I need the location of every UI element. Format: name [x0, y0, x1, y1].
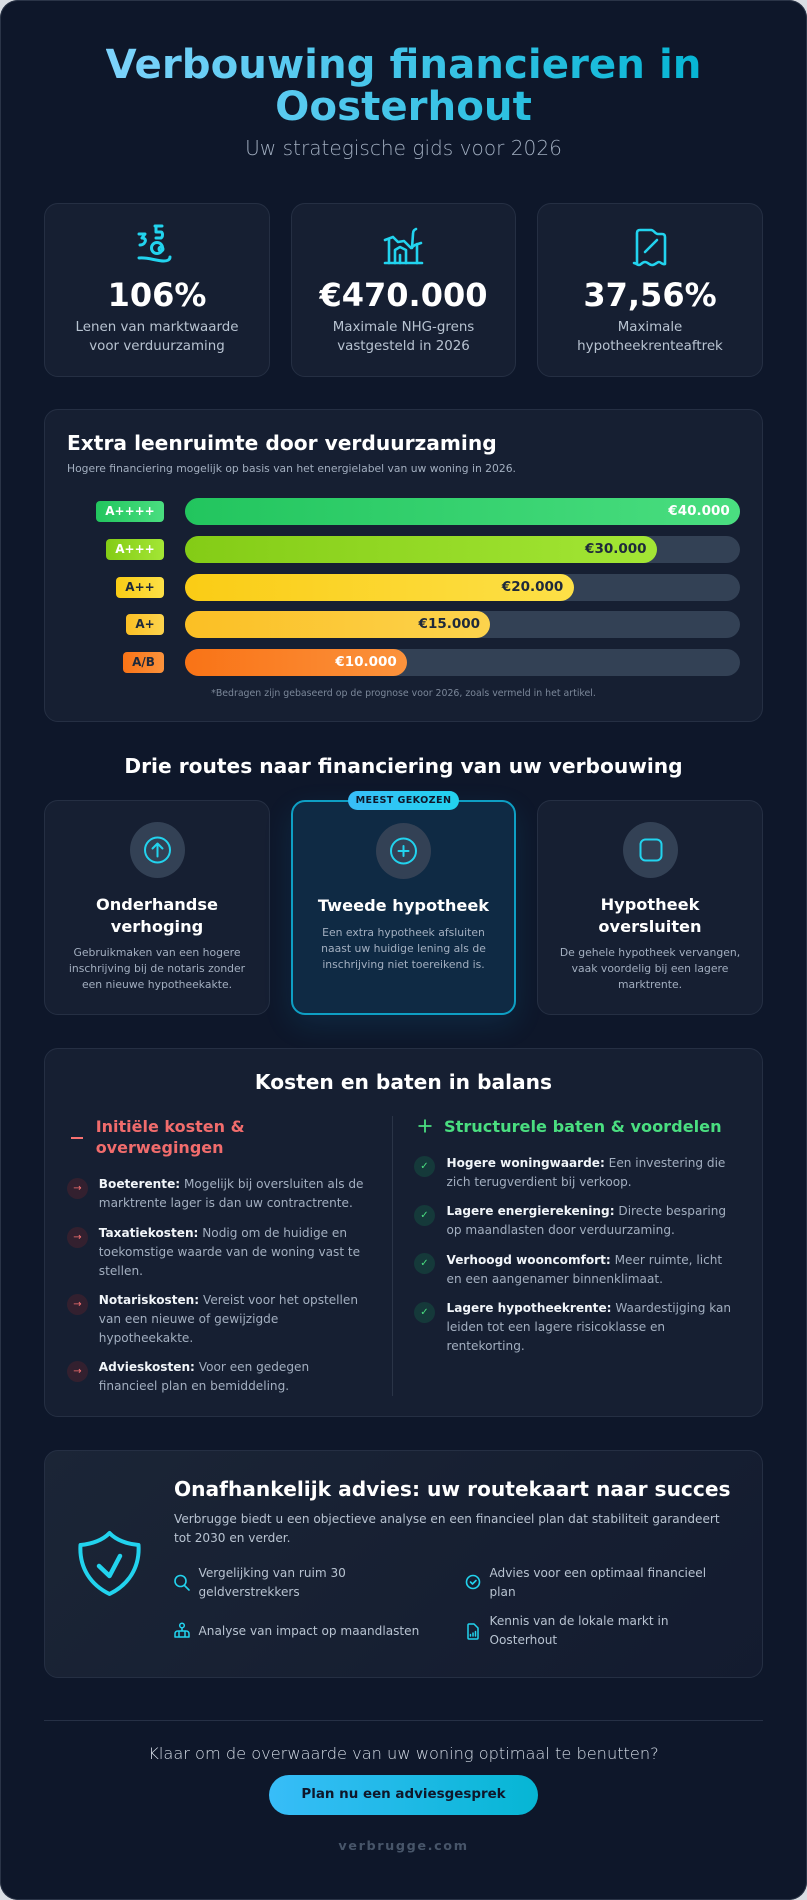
description — [174, 1512, 720, 1544]
icon: people network — [174, 1622, 190, 1638]
route description: een nieuwe hypotheekakte. — [82, 978, 232, 991]
check icon — [414, 1205, 435, 1226]
route title — [598, 895, 702, 936]
value: €470.000 — [319, 276, 488, 314]
benefits column — [414, 1116, 731, 1353]
route title: Tweede hypotheek — [318, 896, 489, 915]
cost item — [98, 1360, 309, 1393]
bar A++: €20.000 — [502, 579, 563, 595]
costs heading: Initiële kosten & — [96, 1116, 245, 1136]
route description: Gebruikmaken van een hogere — [74, 946, 240, 959]
call to action text: Klaar om de overwaarde van uw woning optimaal te benutten? — [148, 1744, 659, 1762]
panel: extra leenruimte chart — [44, 409, 763, 722]
cost item: hypotheekakte. — [99, 1331, 193, 1345]
label: Lenen van marktwaarde — [76, 320, 238, 335]
label: vastgesteld in 2026 — [337, 339, 470, 354]
icon: arrow up in circle — [130, 822, 184, 878]
badge: meest gekozen: MEEST GEKOZEN — [356, 795, 451, 806]
route description: marktrente. — [618, 978, 682, 991]
label — [577, 320, 723, 354]
bullet icon: → — [73, 1183, 82, 1194]
minus icon — [70, 1136, 83, 1138]
bullet icon — [67, 1227, 88, 1248]
label: voor verduurzaming — [89, 339, 225, 354]
route title: Hypotheek — [601, 895, 699, 914]
benefit item: zich terugverdient bij verkoop. — [446, 1174, 632, 1188]
cost item: Boeterente: Mogelijk bij oversluiten als de — [99, 1177, 363, 1191]
feature — [198, 1566, 346, 1598]
benefit item — [446, 1156, 725, 1188]
icon: coins and hand — [138, 224, 172, 262]
divider — [44, 1720, 763, 1721]
cost item: financieel plan en bemiddeling. — [99, 1379, 289, 1393]
route description — [321, 926, 486, 971]
bar A++++: €40.000 — [668, 503, 730, 519]
bullet icon: → — [73, 1299, 82, 1310]
button: Plan nu een adviesgesprek — [301, 1787, 506, 1802]
icon: check circle — [466, 1574, 480, 1590]
label — [76, 320, 238, 354]
footer: verbrugge.com — [338, 1839, 469, 1854]
panel: kosten en baten — [44, 1048, 763, 1417]
check icon: ✓ — [420, 1161, 429, 1172]
feature: Analyse van impact op maandlasten — [198, 1624, 419, 1638]
icon: receipt — [632, 228, 666, 266]
cost item: toekomstige waarde van de woning vast te — [99, 1244, 360, 1258]
feature — [490, 1614, 669, 1647]
feature: Oosterhout — [490, 1633, 557, 1647]
icon: rounded square in circle — [622, 822, 678, 878]
route description: Een extra hypotheek afsluiten — [322, 926, 485, 938]
route description — [69, 946, 246, 991]
benefit item: en een aangenamer binnenklimaat. — [446, 1272, 663, 1286]
value: 37,56% — [583, 276, 717, 314]
benefit item: Verhoogd wooncomfort: Meer ruimte, licht — [446, 1252, 722, 1266]
bullet icon — [67, 1178, 88, 1199]
check icon — [414, 1156, 435, 1177]
bullet icon — [67, 1294, 88, 1315]
route description: De gehele hypotheek vervangen, — [560, 946, 740, 959]
check icon — [414, 1253, 435, 1274]
bar A/B: €10.000 — [335, 654, 397, 670]
cost item: Taxatiekosten: Nodig om de huidige en — [99, 1226, 347, 1240]
icon: document chart — [467, 1623, 479, 1640]
feature: Vergelijking van ruim 30 — [198, 1566, 346, 1580]
panel: stat 106% — [44, 203, 270, 377]
label A/B — [123, 652, 164, 673]
costs heading — [96, 1116, 245, 1157]
plus icon — [418, 1120, 432, 1132]
route description: vaak voordelig bij een lagere — [572, 962, 728, 975]
icon: shield with check — [78, 1530, 141, 1596]
label A++ — [116, 577, 164, 598]
check icon: ✓ — [420, 1210, 429, 1221]
feature — [490, 1566, 706, 1598]
cost item: Notariskosten: Vereist voor het opstellen — [99, 1293, 358, 1307]
icon: house with chart — [384, 228, 424, 264]
feature: Kennis van de lokale markt in — [490, 1614, 669, 1628]
label A+++: A+++ — [115, 542, 155, 556]
benefit item — [446, 1301, 731, 1353]
cost item: van een nieuwe of gewijzigde — [99, 1312, 278, 1326]
bullet icon — [67, 1361, 88, 1382]
check icon: ✓ — [420, 1307, 429, 1318]
heading: Extra leenruimte door verduurzaming — [67, 431, 497, 455]
route description: naast uw huidige lening als de — [321, 942, 486, 955]
title: Verbouwing financieren in — [106, 40, 701, 88]
description: Hogere financiering mogelijk op basis van het energielabel van uw woning in 2026. — [67, 462, 516, 474]
panel: stat NHG — [291, 203, 516, 377]
heading: Kosten en baten in balans — [255, 1070, 552, 1094]
panel: onderhandse verhoging — [44, 800, 270, 1015]
label: Maximale — [618, 320, 682, 335]
badge: meest gekozen — [348, 791, 459, 810]
value: 106% — [108, 276, 206, 314]
label A+: A+ — [135, 617, 155, 631]
title: Oosterhout — [275, 82, 532, 130]
cost item — [99, 1293, 358, 1345]
icon: magnifier — [174, 1574, 190, 1591]
cost item: Advieskosten: Voor een gedegen — [99, 1360, 309, 1374]
feature: Advies voor een optimaal financieel — [490, 1566, 706, 1580]
label — [333, 320, 474, 354]
bar A+: €15.000 — [419, 616, 480, 632]
description: Verbrugge biedt u een objectieve analyse en een financieel plan dat stabiliteit garandeert — [174, 1512, 720, 1526]
cost item: stellen. — [99, 1264, 143, 1278]
benefit item: leiden tot een lagere risicoklasse en — [446, 1320, 665, 1334]
heading: Onafhankelijk advies: uw routekaart naar succes — [174, 1477, 731, 1501]
route description: inschrijving niet toereikend is. — [322, 958, 485, 971]
benefit item: Lagere hypotheekrente: Waardestijging kan — [446, 1301, 731, 1315]
section heading: routes: Drie routes naar financiering van uw verbouwing — [124, 754, 683, 778]
label: Maximale NHG-grens — [333, 320, 474, 335]
button — [269, 1775, 538, 1815]
route description — [560, 946, 740, 991]
label A+ — [126, 614, 164, 635]
description: tot 2030 en verder. — [174, 1530, 290, 1544]
bar A+++ — [185, 536, 740, 563]
cost item: marktrente lager is dan uw contractrente. — [99, 1196, 353, 1210]
feature: plan — [490, 1584, 516, 1598]
benefit item: Hogere woningwaarde: Een investering die — [446, 1156, 725, 1170]
label A++++: A++++ — [105, 504, 155, 518]
bar A/B — [185, 649, 740, 676]
panel: onafhankelijk advies — [44, 1450, 763, 1678]
subtitle: Uw strategische gids voor 2026 — [245, 136, 562, 160]
bar A++++ — [185, 498, 740, 525]
benefit item: Lagere energierekening: Directe besparing — [446, 1204, 726, 1218]
cost item — [99, 1177, 363, 1210]
route title: Onderhandse — [96, 895, 218, 914]
benefit item: rentekorting. — [446, 1339, 525, 1353]
bar A++ — [185, 574, 740, 601]
route title — [96, 895, 218, 936]
cost item — [98, 1226, 360, 1278]
check icon: ✓ — [420, 1258, 429, 1269]
route title: verhoging — [111, 917, 203, 936]
benefit item — [446, 1252, 722, 1286]
costs heading: overwegingen — [96, 1138, 224, 1157]
benefit item — [446, 1204, 726, 1237]
panel: stat renteaftrek — [537, 203, 763, 377]
label: hypotheekrenteaftrek — [577, 339, 723, 354]
panel: hypotheek oversluiten — [537, 800, 763, 1015]
label A++++ — [96, 501, 164, 522]
benefit item: op maandlasten door verduurzaming. — [446, 1223, 675, 1237]
feature: geldverstrekkers — [198, 1584, 300, 1598]
panel: tweede hypotheek (highlighted) — [291, 800, 516, 1015]
bar A+ — [185, 611, 740, 638]
route title: oversluiten — [598, 917, 702, 936]
route description: inschrijving bij de notaris zonder — [69, 962, 245, 975]
footnote: *Bedragen zijn gebaseerd op de prognose voor 2026, zoals vermeld in het artikel. — [211, 688, 596, 698]
label A++: A++ — [125, 580, 155, 594]
icon: plus in circle — [376, 823, 431, 879]
title — [106, 40, 701, 130]
label A+++ — [106, 539, 164, 560]
costs column — [67, 1116, 363, 1393]
check icon — [414, 1302, 435, 1323]
column divider — [392, 1116, 393, 1396]
label A/B: A/B — [132, 655, 155, 669]
bullet icon: → — [73, 1366, 82, 1377]
benefits heading: Structurele baten & voordelen — [444, 1116, 722, 1136]
bar A+++: €30.000 — [585, 541, 647, 557]
bullet icon: → — [73, 1232, 82, 1243]
